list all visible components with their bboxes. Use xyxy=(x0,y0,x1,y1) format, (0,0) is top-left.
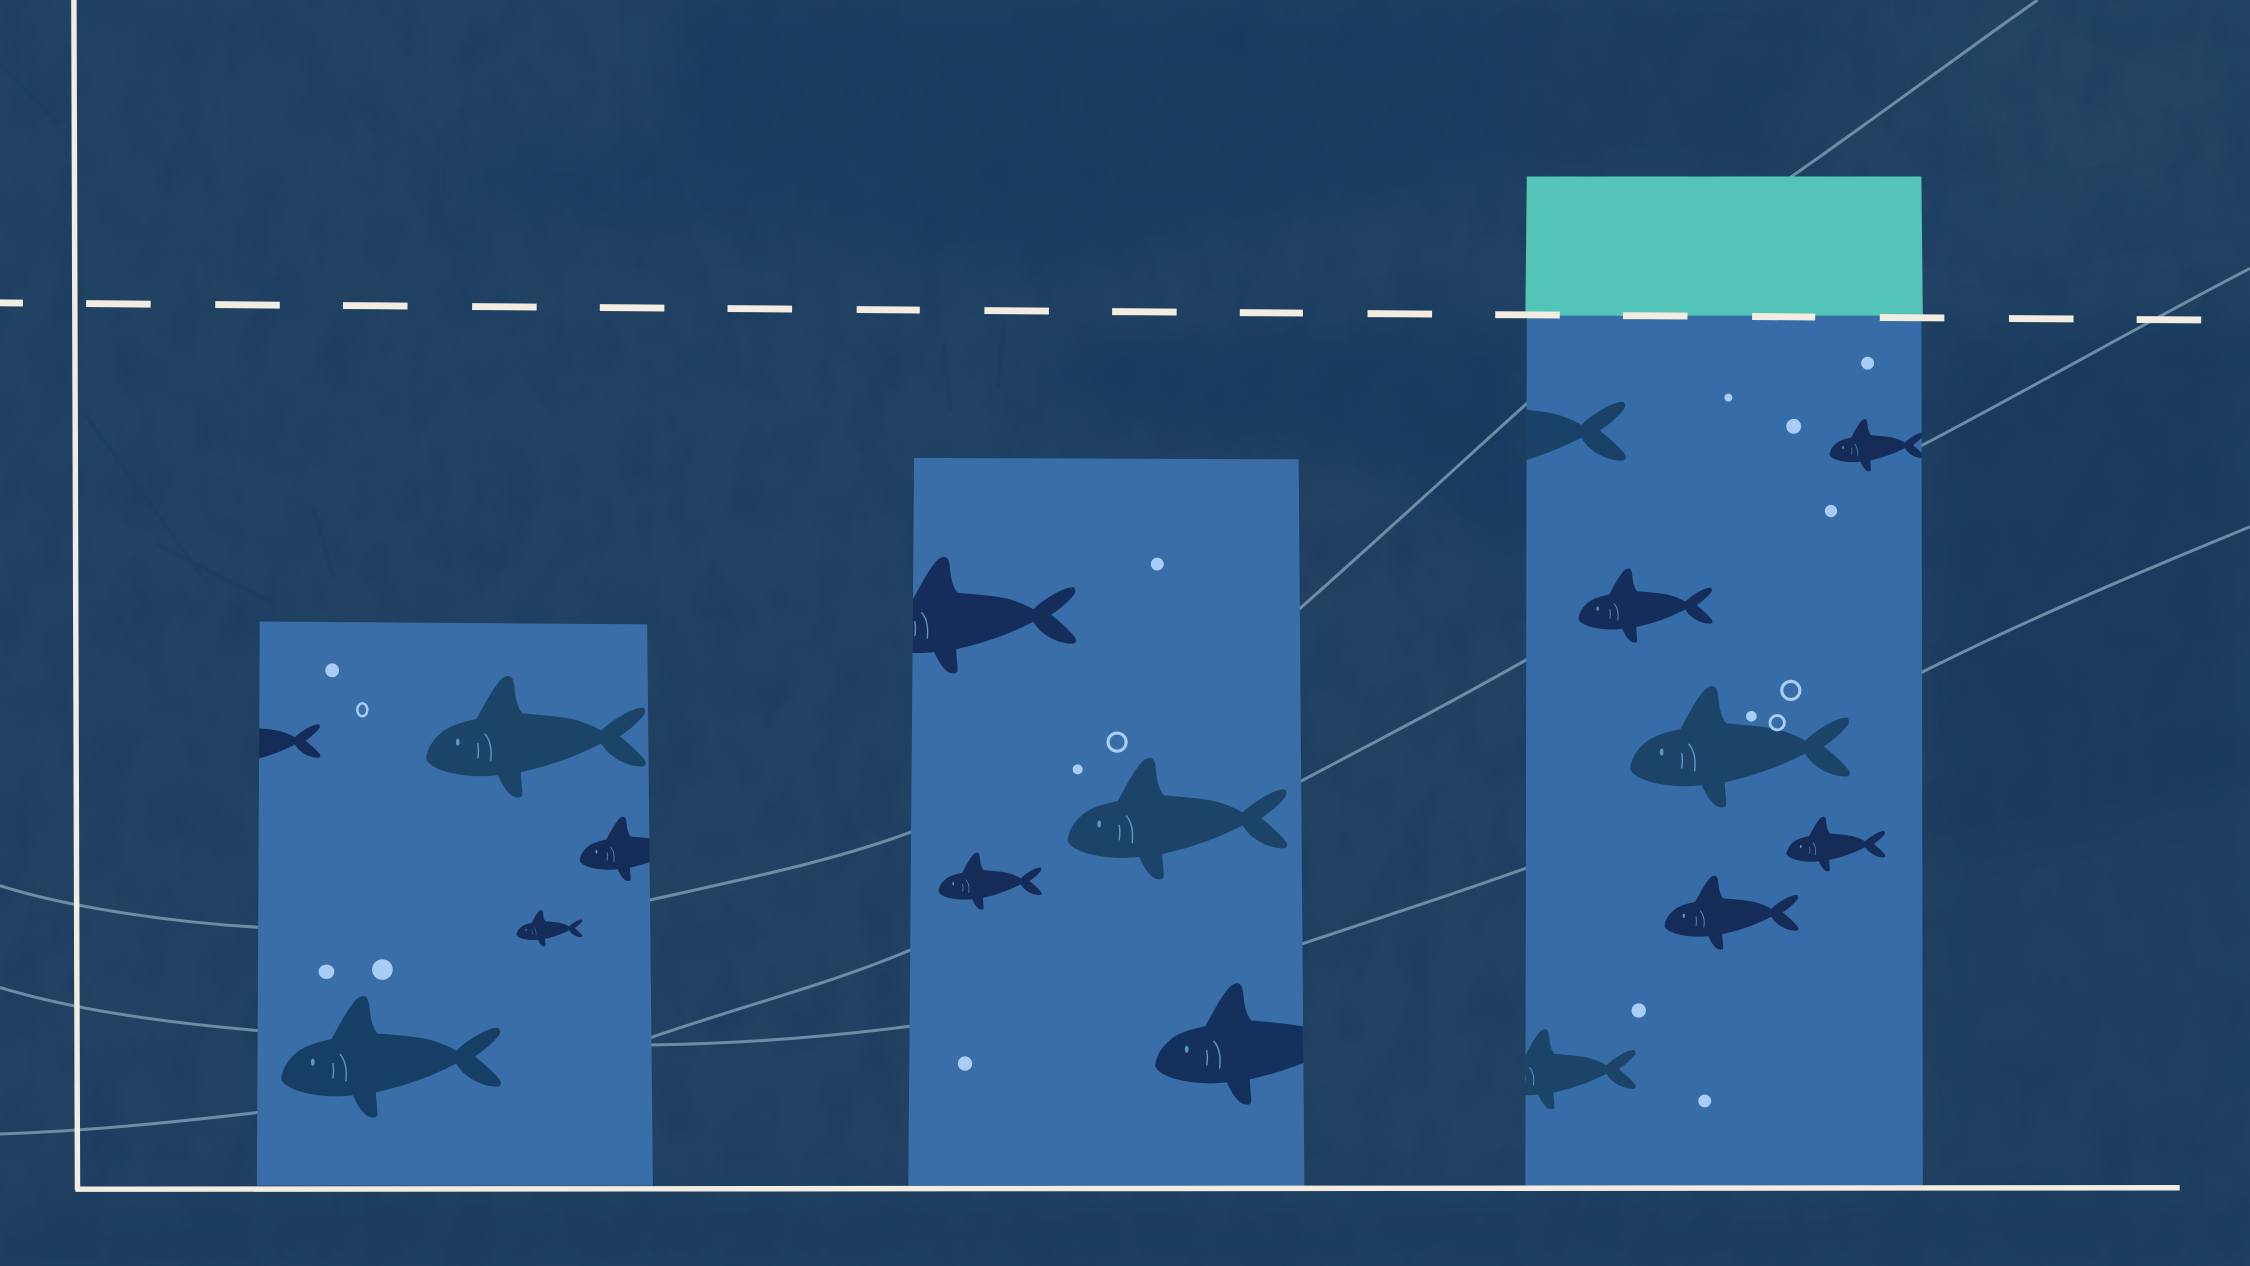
bubbles xyxy=(319,663,393,980)
shark: clipped tail xyxy=(1526,402,1626,461)
bar 2 with sharks xyxy=(908,458,1304,1186)
threshold: dashed line xyxy=(0,303,2201,320)
bar 3 with sharks xyxy=(1525,316,1923,1186)
shark: large middle xyxy=(1630,686,1850,808)
trend line: bottom xyxy=(0,527,2250,1134)
bar 1 with sharks xyxy=(256,622,653,1186)
shark: tiny xyxy=(517,910,582,946)
shark: small right xyxy=(1787,817,1885,871)
shark: clipped right xyxy=(1830,419,1924,471)
bar 3 excess above threshold: teal block xyxy=(1525,177,1923,316)
trend line: top xyxy=(0,0,2038,930)
shark: small xyxy=(938,853,1042,910)
shark: clipped lower left xyxy=(1526,1029,1636,1110)
shark: clipped right xyxy=(1155,983,1304,1105)
background scratches xyxy=(0,65,1004,603)
bubbles xyxy=(1632,357,1874,1107)
shark: large upper xyxy=(426,676,646,797)
shark: clipped left xyxy=(912,556,1076,674)
shark: upper xyxy=(1578,568,1712,642)
shark: clipped left xyxy=(259,724,320,758)
bubbles xyxy=(958,558,1164,1071)
shark: large lower xyxy=(281,996,501,1118)
trend line: middle xyxy=(0,268,2250,1057)
shark: clipped right xyxy=(580,816,650,882)
shark: lower middle xyxy=(1665,876,1799,950)
shark: large middle xyxy=(1068,758,1287,879)
